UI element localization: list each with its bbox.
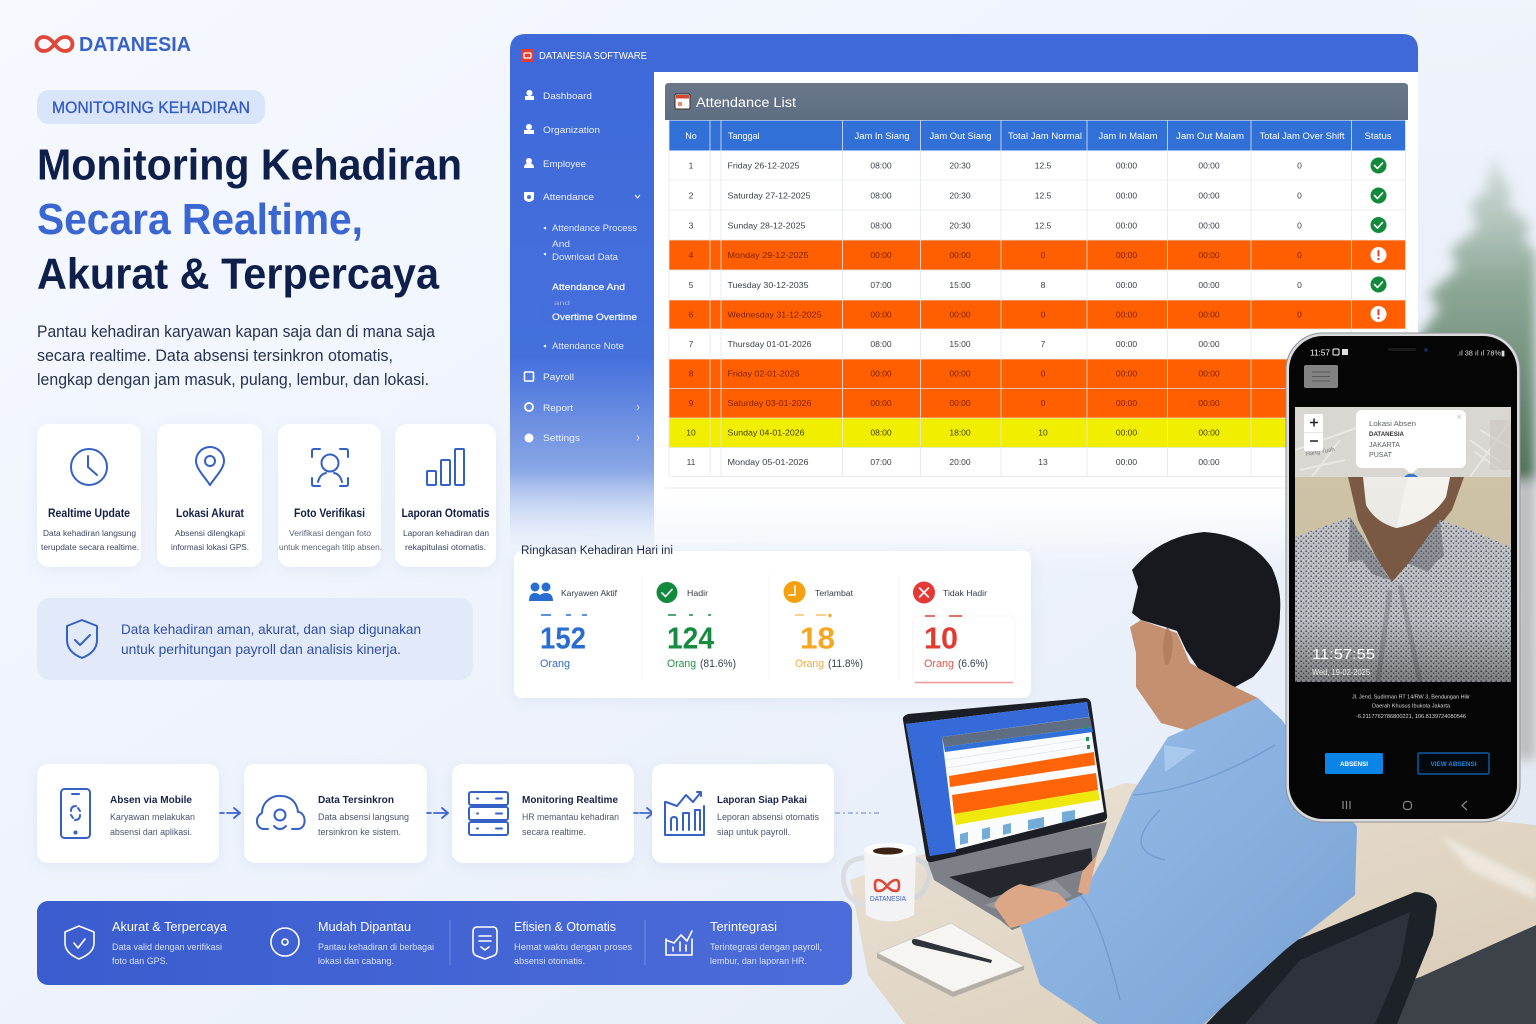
row 1: 20:30 — [949, 160, 971, 170]
feature card: foto verifikasi — [278, 424, 382, 567]
icon: green check — [656, 582, 678, 603]
attendance list title bar — [665, 83, 1408, 120]
stat: karyawan aktif: 152 — [540, 620, 586, 656]
navigation bar — [1343, 801, 1467, 810]
category pill: MONITORING KEHADIRAN — [52, 99, 250, 117]
sidebar menu: Download Data — [552, 252, 618, 262]
benefit: efisien dan otomatis: Efisien & Otomatis — [514, 920, 616, 934]
flow step: data tersinkron — [244, 764, 427, 863]
stat: terlambat — [784, 581, 863, 670]
feature card: realtime update: Realtime Update — [48, 508, 130, 520]
flow step: absen via mobile: Absen via Mobile — [110, 794, 192, 806]
table header row: Tanggal — [728, 131, 760, 141]
logo — [36, 34, 191, 56]
sidebar menu: Payroll — [543, 372, 574, 383]
sidebar menu: Settings — [543, 433, 580, 444]
stat: terlambat: (11.8%) — [828, 658, 863, 670]
stat: tidak hadir: 10 — [924, 620, 958, 656]
row 7: Thursday 01-01-2026 — [728, 339, 812, 349]
dotted connector to laptop — [835, 812, 882, 814]
stat: tidak hadir: Orang — [924, 658, 954, 670]
benefits banner — [37, 901, 852, 985]
row 3: Sunday 28-12-2025 — [728, 220, 806, 230]
row 1: 1 — [689, 160, 694, 170]
row 1: 12.5 — [1035, 160, 1052, 170]
sidebar menu: Attendance And — [552, 282, 625, 293]
row 8: 00:00 — [949, 368, 971, 378]
row 8: 00:00 — [870, 368, 892, 378]
benefit: akurat dan terpercaya: Data valid dengan verifikasi — [112, 942, 222, 952]
icon: report chart — [665, 792, 704, 835]
icon: location pin — [196, 447, 224, 485]
feature card: lokasi akurat — [157, 424, 262, 567]
hands — [994, 855, 1097, 928]
row 5: 5 — [689, 280, 694, 290]
row 7: 15:00 — [949, 339, 971, 349]
stat: hadir: (81.6%) — [700, 658, 736, 670]
intro paragraph: Pantau kehadiran karyawan kapan saja dan di mana saja — [37, 323, 436, 341]
row 1: Friday 26-12-2025 — [728, 160, 800, 170]
feature card: laporan otomatis — [395, 424, 496, 567]
benefit: mudah dipantau — [271, 920, 434, 966]
stat: tidak hadir: (6.6%) — [958, 658, 988, 670]
row 8: 00:00 — [1198, 368, 1220, 378]
row 2: 0 — [1297, 190, 1302, 200]
benefit: mudah dipantau: Mudah Dipantau — [318, 920, 411, 934]
row 9: 00:00 — [949, 398, 971, 408]
feature card: laporan otomatis: Laporan Otomatis — [402, 508, 490, 520]
address text: Jl. Jend. Sudirman RT 14/RW 3, Bendungan Hilir — [1352, 694, 1470, 700]
row 8: 0 — [1041, 368, 1046, 378]
row 6: Wednesday 31-12-2025 — [728, 310, 822, 320]
desk — [850, 783, 1536, 1024]
feature card: realtime update — [37, 424, 141, 567]
row 10: 00:00 — [1198, 428, 1220, 438]
row 5: 0 — [1297, 280, 1302, 290]
row 4: 00:00 — [949, 250, 971, 260]
shirt — [1019, 698, 1357, 1024]
header brand: DATANESIA SOFTWARE — [539, 51, 647, 62]
flow step: monitoring realtime — [452, 764, 634, 863]
row 9: 00:00 — [870, 398, 892, 408]
icon: document badge — [473, 927, 497, 959]
sidebar menu: Attendance Note — [552, 341, 624, 351]
row 4: 00:00 — [870, 250, 892, 260]
benefit: mudah dipantau: lokasi dan cabang. — [318, 956, 394, 966]
popup: Lokasi Absen — [1369, 419, 1416, 428]
row 3 — [669, 210, 1406, 240]
icon: orange clock — [784, 581, 806, 603]
address text: -6.2117762786800221, 106.8139724080546 — [1356, 714, 1466, 720]
icon: mug logo — [875, 880, 899, 891]
smartphone — [1286, 333, 1520, 822]
zoom control — [1304, 414, 1323, 451]
icon: cloud sync — [257, 796, 305, 829]
icon: smartphone — [61, 789, 90, 838]
icon: server stack — [469, 792, 508, 835]
feature card: lokasi akurat: informasi lokasi GPS. — [171, 542, 249, 552]
attendance list title bar: Attendance List — [696, 95, 796, 110]
table header row: Jam In Malam — [1098, 131, 1158, 141]
sidebar menu: Attendance Process — [552, 223, 638, 233]
stat: hadir: Orang — [667, 658, 696, 670]
stat: hadir — [656, 582, 736, 670]
flow step: monitoring realtime: secara realtime. — [522, 827, 586, 837]
row 4: Monday 29-12-2025 — [728, 250, 809, 260]
flow step: monitoring realtime: HR memantau kehadiran — [522, 812, 619, 822]
hair — [1132, 532, 1280, 687]
row 10: Sunday 04-01-2026 — [728, 428, 805, 438]
row 6: 00:00 — [1198, 310, 1220, 320]
row 6: 00:00 — [949, 310, 971, 320]
face mask — [1363, 477, 1450, 528]
flow step: data tersinkron: Data absensi langsung — [318, 812, 409, 822]
button: view absensi: VIEW ABSENSI — [1430, 762, 1477, 768]
row 8: Friday 02-01-2026 — [728, 368, 800, 378]
row 8: 8 — [689, 368, 694, 378]
neck and face — [1130, 620, 1258, 730]
row 7: 7 — [689, 339, 694, 349]
icon: target pin — [271, 928, 299, 956]
menu button — [1304, 365, 1338, 388]
title: Akurat & Terpercaya — [37, 250, 439, 298]
summary panel: ringkasan kehadiran — [514, 545, 1031, 698]
benefit: terintegrasi: lembur, dan laporan HR. — [710, 956, 807, 966]
benefit: efisien dan otomatis: absensi otomatis. — [514, 956, 585, 966]
stat: karyawan aktif: Orang — [540, 658, 570, 670]
row 4: 0 — [1297, 250, 1302, 260]
location map — [1295, 407, 1511, 477]
patterned shirt — [1295, 517, 1511, 682]
status bar — [1310, 348, 1505, 358]
row 2 — [669, 180, 1406, 210]
status bar: .ıl 38 ıl ıl 78%▮ — [1457, 348, 1505, 358]
stat: karyawan aktif — [529, 582, 618, 670]
callout: data security: Data kehadiran aman, akurat, dan siap digunakan — [121, 621, 421, 637]
row 9: 9 — [689, 398, 694, 408]
stat: tidak hadir — [913, 582, 1015, 683]
row 2: 00:00 — [1198, 190, 1220, 200]
benefit: terintegrasi — [666, 920, 822, 966]
stat: hadir: Hadir — [687, 588, 708, 598]
benefit: efisien dan otomatis — [473, 920, 633, 966]
table header row: Jam Out Malam — [1176, 131, 1244, 141]
row 9: 00:00 — [1116, 398, 1137, 408]
row 1 — [669, 151, 1406, 180]
address text — [1352, 694, 1470, 720]
feature card: realtime update: terupdate secara realtime. — [41, 542, 139, 552]
icon: infinity logo — [36, 37, 72, 51]
row 2: 08:00 — [870, 190, 892, 200]
neck — [1348, 477, 1464, 590]
table header row — [669, 120, 1406, 150]
row 11: 00:00 — [1116, 457, 1137, 467]
row 2: 20:30 — [949, 190, 971, 200]
row 2: 2 — [689, 190, 694, 200]
flow step: data tersinkron: tersinkron ke sistem. — [318, 827, 401, 837]
row 2: 00:00 — [1116, 190, 1137, 200]
popup — [1356, 410, 1466, 474]
intro paragraph — [37, 323, 436, 389]
row 11: 00:00 — [1198, 457, 1220, 467]
row 8 — [669, 359, 1406, 388]
row 8: 00:00 — [1116, 368, 1137, 378]
sidebar menu: Overtime Overtime — [552, 312, 637, 323]
office backdrop: blurred plant and desk — [850, 0, 1536, 1024]
row 3: 20:30 — [949, 220, 971, 230]
chair back — [1206, 892, 1437, 1024]
laptop — [903, 698, 1107, 930]
row 9 — [669, 388, 1406, 418]
sidebar menu — [524, 90, 654, 444]
flow step: laporan siap pakai: siap untuk payroll. — [717, 827, 790, 837]
row 7: 00:00 — [1116, 339, 1137, 349]
table header row: Jam Out Siang — [930, 131, 992, 141]
intro paragraph: secara realtime. Data absensi tersinkron otomatis, — [37, 347, 393, 365]
row 10: 18:00 — [949, 428, 971, 438]
arrow: step 2 to 3 — [427, 808, 448, 818]
row 2: Saturday 27-12-2025 — [728, 190, 811, 200]
main content area — [654, 72, 1418, 572]
row 9: 00:00 — [1198, 398, 1220, 408]
table header row: No — [685, 131, 697, 141]
sidebar menu: and — [554, 301, 570, 307]
summary panel: ringkasan kehadiran: Ringkasan Kehadiran Hari ini — [521, 545, 673, 557]
row 10: 10 — [1038, 428, 1048, 438]
benefit: terintegrasi: Terintegrasi dengan payroll, — [710, 942, 822, 952]
row 11: 11 — [687, 457, 696, 467]
row 1: 0 — [1297, 160, 1302, 170]
row 11: 13 — [1038, 457, 1048, 467]
row 5: 15:00 — [949, 280, 971, 290]
row 10: 10 — [686, 428, 696, 438]
brand name: DATANESIA — [79, 34, 191, 56]
icon: pen — [912, 939, 992, 963]
sidebar menu: Organization — [543, 125, 600, 136]
category pill — [37, 90, 265, 124]
row 10: 00:00 — [1116, 428, 1137, 438]
icon: bar chart — [427, 449, 464, 485]
row 11 — [669, 448, 1406, 476]
row 5 — [669, 270, 1406, 300]
arrow: step 3 to 4 — [634, 808, 653, 818]
mug: DATANESIA — [870, 896, 906, 903]
laptop screen bezel — [903, 698, 1107, 862]
row 11: Monday 05-01-2026 — [728, 457, 809, 467]
icon: shield — [65, 926, 94, 959]
row 10: 08:00 — [870, 428, 892, 438]
row 1: 08:00 — [870, 160, 892, 170]
selfie photo: Wed, 19-02-2025 — [1312, 668, 1371, 677]
laptop base — [927, 822, 1107, 930]
row 1: 00:00 — [1116, 160, 1137, 170]
sidebar menu: And — [552, 239, 570, 249]
button: view absensi — [1418, 753, 1489, 774]
laptop screen contents — [906, 702, 1104, 856]
table header row: Status — [1364, 131, 1392, 141]
notebook and pen — [877, 923, 1024, 997]
table header row: Jam In Siang — [854, 131, 910, 141]
popup: DATANESIA — [1369, 431, 1404, 438]
row 3: 08:00 — [870, 220, 892, 230]
benefit: akurat dan terpercaya: foto dan GPS. — [112, 956, 168, 966]
row 6: 00:00 — [1116, 310, 1137, 320]
sidebar — [510, 50, 655, 545]
icon: clock — [71, 449, 107, 485]
row 11: 07:00 — [870, 457, 892, 467]
title: Monitoring Kehadiran — [37, 140, 462, 190]
row 4: 4 — [689, 250, 694, 260]
location map: Hang Tuah — [1305, 447, 1335, 458]
mug — [843, 843, 929, 922]
feature card: lokasi akurat: Absensi dilengkapi — [175, 528, 245, 538]
row 6: 0 — [1041, 310, 1046, 320]
stat: hadir: 124 — [667, 620, 715, 656]
sidebar menu: Attendance — [543, 192, 594, 203]
row 7: 08:00 — [870, 339, 892, 349]
feature card: foto verifikasi: Foto Verifikasi — [294, 508, 365, 520]
row 6: 00:00 — [870, 310, 892, 320]
callout: data security — [37, 598, 473, 680]
flow step: laporan siap pakai: Laporan Siap Pakai — [717, 794, 807, 806]
row 6: 6 — [689, 310, 694, 320]
table header row: Total Jam Normal — [1008, 131, 1082, 141]
feature card: foto verifikasi: Verifikasi dengan foto — [289, 528, 371, 538]
stat: tidak hadir: Tidak Hadir — [943, 588, 987, 598]
feature card: foto verifikasi: untuk mencegah titip absen. — [279, 542, 382, 552]
feature card: laporan otomatis: Laporan kehadiran dan — [403, 528, 489, 538]
flow step: absen via mobile — [37, 764, 219, 863]
benefit: akurat dan terpercaya — [65, 920, 227, 966]
floor — [980, 925, 1536, 1024]
row 5: 00:00 — [1116, 280, 1137, 290]
row 4: 00:00 — [1198, 250, 1220, 260]
row 3: 3 — [689, 220, 694, 230]
person at desk — [994, 532, 1437, 1024]
stat: terlambat: 18 — [800, 620, 835, 656]
row 3: 0 — [1297, 220, 1302, 230]
row 7: 00:00 — [1198, 339, 1220, 349]
arrow: step 1 to 2 — [220, 808, 240, 818]
address text: Daerah Khusus Ibukota Jakarta — [1372, 704, 1451, 710]
sidebar menu: Dashboard — [543, 91, 592, 102]
flow step: monitoring realtime: Monitoring Realtime — [522, 794, 618, 806]
row 11: 20:00 — [949, 457, 971, 467]
row 3: 00:00 — [1116, 220, 1137, 230]
status bar: 11:57 — [1310, 348, 1331, 358]
row 6: 0 — [1297, 310, 1302, 320]
row 10 — [669, 418, 1406, 448]
stat: karyawan aktif: Karyawen Aktif — [561, 588, 618, 598]
title — [37, 140, 462, 298]
stat: terlambat: Terlambat — [815, 588, 854, 598]
row 9: 0 — [1041, 398, 1046, 408]
row 6 — [669, 300, 1406, 329]
callout: data security: untuk perhitungan payroll dan analisis kinerja. — [121, 641, 401, 657]
row 4 — [669, 240, 1406, 270]
row 5: 8 — [1041, 280, 1046, 290]
benefit: akurat dan terpercaya: Akurat & Terpercaya — [112, 920, 227, 934]
location marker — [1404, 474, 1418, 477]
row 7: 7 — [1041, 339, 1046, 349]
attendance table — [665, 120, 1406, 488]
popup: JAKARTA — [1369, 440, 1400, 449]
dashboard window — [510, 34, 1418, 572]
flow step: laporan siap pakai — [652, 764, 834, 863]
row 5: Tuesday 30-12-2035 — [728, 280, 809, 290]
window header — [510, 34, 1418, 72]
button: absensi — [1325, 753, 1383, 774]
row 3: 12.5 — [1035, 220, 1052, 230]
row 5: 00:00 — [1198, 280, 1220, 290]
icon: chart — [666, 931, 692, 955]
sidebar menu: Employee — [543, 159, 586, 170]
button: absensi: ABSENSI — [1340, 762, 1368, 768]
popup: PUSAT — [1369, 450, 1392, 459]
feature card: lokasi akurat: Lokasi Akurat — [176, 508, 244, 520]
icon: shield check — [67, 620, 97, 658]
selfie photo: 11:57:55 — [1312, 646, 1375, 663]
row 3: 00:00 — [1198, 220, 1220, 230]
flow step: data tersinkron: Data Tersinkron — [318, 794, 394, 806]
benefit: terintegrasi: Terintegrasi — [710, 920, 777, 934]
row 4: 00:00 — [1116, 250, 1137, 260]
row 5: 07:00 — [870, 280, 892, 290]
icon: red cross — [913, 582, 935, 604]
blurred plant — [1420, 155, 1536, 760]
benefit: mudah dipantau: Pantau kehadiran di berbagai — [318, 942, 434, 952]
selfie photo — [1295, 477, 1511, 682]
icon: face scan — [312, 449, 348, 486]
stat: terlambat: Orang — [795, 658, 824, 670]
title: Secara Realtime, — [37, 195, 363, 244]
flow step: absen via mobile: Karyawan melakukan — [110, 812, 195, 822]
row 4: 0 — [1041, 250, 1046, 260]
flow step: laporan siap pakai: Leporan absensi otomatis — [717, 812, 819, 822]
sidebar menu: Report — [543, 403, 573, 414]
intro paragraph: lengkap dengan jam masuk, pulang, lembur, dan lokasi. — [37, 371, 429, 389]
icon: people — [529, 582, 553, 601]
feature card: realtime update: Data kehadiran langsung — [43, 528, 136, 538]
feature card: laporan otomatis: rekapitulasi otomatis. — [405, 542, 486, 552]
row 1: 00:00 — [1198, 160, 1220, 170]
row 2: 12.5 — [1035, 190, 1052, 200]
flow step: absen via mobile: absensi dari aplikasi. — [110, 827, 192, 837]
row 7 — [669, 329, 1406, 359]
row 9: Saturday 03-01-2026 — [728, 398, 812, 408]
table header row: Total Jam Over Shift — [1260, 131, 1345, 141]
benefit: efisien dan otomatis: Hemat waktu dengan proses — [514, 942, 633, 952]
